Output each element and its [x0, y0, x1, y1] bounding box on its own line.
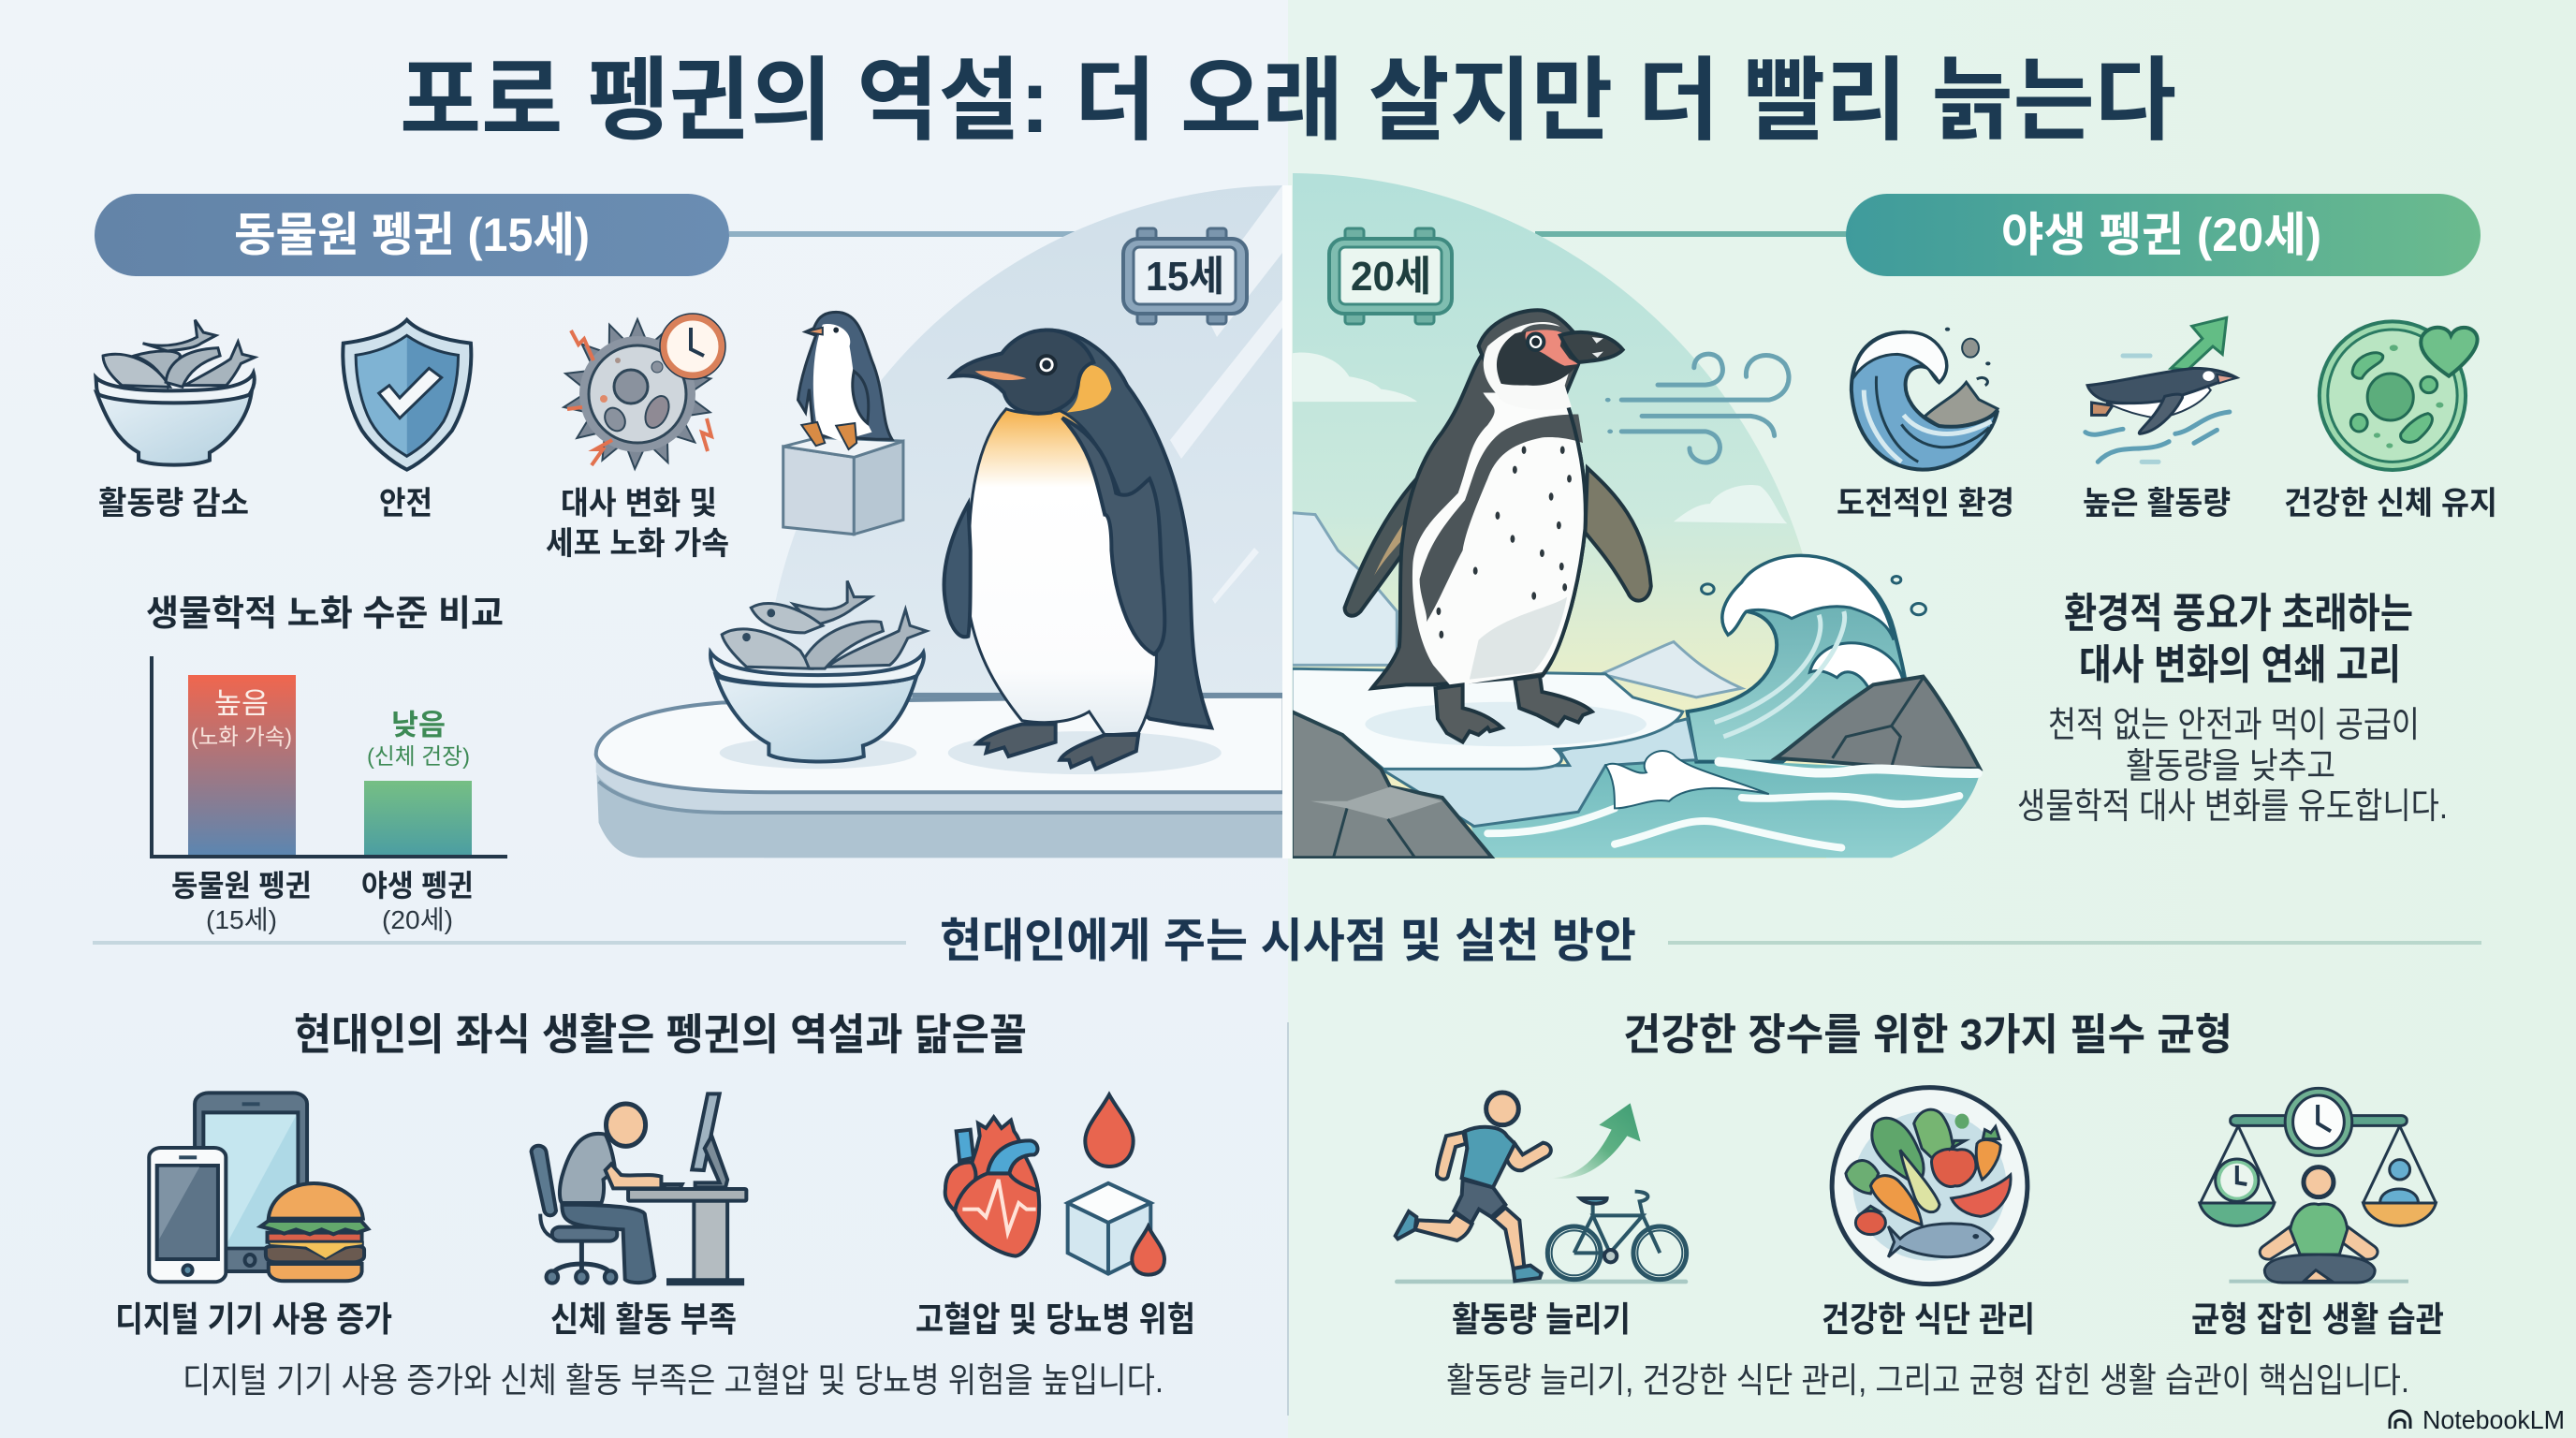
connector line — [1535, 231, 1849, 237]
text block: metabolic chain — [2017, 591, 2448, 827]
text block: metabolic chain: 천적 없는 안전과 먹이 공급이 — [2048, 706, 2420, 745]
label: 균형 잡힌 생활 습관 — [2191, 1300, 2444, 1339]
label: 신체 활동 부족 — [550, 1300, 737, 1339]
bar chart: biological aging: 낮음 — [391, 709, 446, 741]
subheading: three balances: 건강한 장수를 위한 3가지 필수 균형 — [1623, 1010, 2232, 1059]
chart title: 생물학적 노화 수준 비교 — [146, 594, 504, 634]
right rock — [1776, 677, 1980, 769]
background: wild side — [1288, 0, 2576, 1438]
ice floe — [1381, 719, 1696, 827]
icon: person at desk — [532, 1093, 746, 1284]
large penguin — [944, 330, 1211, 769]
connector line — [729, 231, 1076, 237]
icon: runner and bicycle — [1395, 1093, 1688, 1284]
watermark: NotebookLM: NotebookLM — [2422, 1405, 2565, 1434]
bar: wild penguin — [364, 781, 472, 855]
label: 활동량 감소 — [98, 486, 249, 521]
wind lines — [1621, 354, 1789, 462]
icebergs — [1292, 513, 1397, 665]
bar: zoo penguin — [188, 675, 296, 855]
wild penguin — [1345, 310, 1651, 742]
text block: metabolic chain: 환경적 풍요가 초래하는 — [2064, 591, 2413, 637]
scene drawing in scaled coordinates — [1292, 310, 1980, 858]
label: 고혈압 및 당뇨병 위험 — [915, 1300, 1195, 1339]
icon: devices and burger — [149, 1093, 368, 1282]
heading pill: zoo penguin — [95, 194, 729, 276]
label: 안전 — [379, 486, 432, 521]
panel: wild penguin illustration — [1288, 169, 1999, 861]
white split between illustrations — [1282, 185, 1292, 858]
clouds — [1292, 352, 1787, 523]
platform — [596, 696, 1284, 858]
timer sign 15세 — [1123, 228, 1247, 324]
label: 도전적인 환경 — [1837, 486, 2014, 521]
icon: balance scale and meditator — [2200, 1088, 2436, 1284]
icon: heart, blood and sugar — [945, 1094, 1164, 1275]
icon: healthy plate — [1832, 1088, 2027, 1284]
bar chart: biological aging: (15세) — [206, 905, 277, 934]
timer sign 20세 — [1329, 228, 1452, 324]
icon: shield — [343, 320, 471, 470]
text block: metabolic chain: 활동량을 낮추고 — [2126, 747, 2335, 786]
panel: zoo penguin illustration — [596, 178, 1292, 861]
bar chart: biological aging: (신체 건장) — [367, 744, 470, 770]
label: 디지털 기기 사용 증가 — [115, 1300, 392, 1339]
small penguin on cube — [783, 312, 903, 535]
text block: metabolic chain: 생물학적 대사 변화를 유도합니다. — [2017, 787, 2448, 827]
scene drawing in scaled coordinates — [596, 312, 1284, 858]
bar chart: biological aging — [150, 656, 507, 934]
foam — [1487, 762, 1978, 848]
bar chart: biological aging: (20세) — [382, 905, 453, 934]
icon: fish bowl — [95, 320, 255, 465]
splash — [1605, 751, 1769, 808]
label: 높은 활동량 — [2083, 486, 2231, 521]
label: 건강한 신체 유지 — [2284, 486, 2497, 521]
sea — [1470, 758, 1980, 858]
label: 대사 변화 및 — [561, 486, 717, 521]
divider — [1287, 1022, 1289, 1416]
label: 세포 노화 가속 — [546, 526, 729, 562]
section heading — [93, 915, 2481, 967]
background: zoo side — [0, 0, 1288, 1438]
label — [546, 486, 729, 562]
text block: sedentary summary: 디지털 기기 사용 증가와 신체 활동 부족은 고혈압 및 당뇨병 위험을 높입니다. — [183, 1361, 1164, 1400]
section heading: 현대인에게 주는 시사점 및 실천 방안 — [940, 915, 1636, 967]
label: 건강한 식단 관리 — [1822, 1300, 2035, 1339]
scene backdrop — [1293, 173, 1826, 858]
timer sign 15세: 15세 — [1146, 254, 1224, 300]
bar chart: biological aging: 동물원 펭귄 — [171, 869, 312, 902]
timer sign 20세: 20세 — [1351, 254, 1431, 300]
label: 활동량 늘리기 — [1452, 1300, 1631, 1339]
left rock — [1292, 712, 1492, 858]
icon: crashing wave — [1852, 328, 1998, 470]
bar chart: biological aging: 야생 펭귄 — [361, 869, 474, 902]
breaking wave — [1688, 556, 1905, 762]
heading pill: zoo penguin: 동물원 펭귄 (15세) — [234, 209, 590, 261]
enclosure backdrop — [766, 185, 1282, 693]
bar chart: biological aging: (노화 가속) — [191, 725, 292, 750]
icon: aging cell — [562, 314, 725, 469]
heading pill: wild penguin — [1846, 194, 2481, 276]
icon: swimming penguin with arrow — [2086, 317, 2236, 462]
title: 포로 펭귄의 역설: 더 오래 살지만 더 빨리 늙는다 — [400, 50, 2176, 152]
bowl of fish — [710, 580, 927, 761]
subheading: sedentary life: 현대인의 좌식 생활은 펭귄의 역설과 닮은꼴 — [294, 1010, 1027, 1059]
icon: healthy cell — [2320, 321, 2478, 470]
text block: balance summary: 활동량 늘리기, 건강한 식단 관리, 그리고 균형 잡힌 생활 습관이 핵심입니다. — [1446, 1361, 2409, 1400]
heading pill: wild penguin: 야생 펭귄 (20세) — [2001, 209, 2321, 261]
text block: metabolic chain: 대사 변화의 연쇄 고리 — [2079, 642, 2401, 688]
bar chart: biological aging: 높음 — [214, 687, 269, 720]
